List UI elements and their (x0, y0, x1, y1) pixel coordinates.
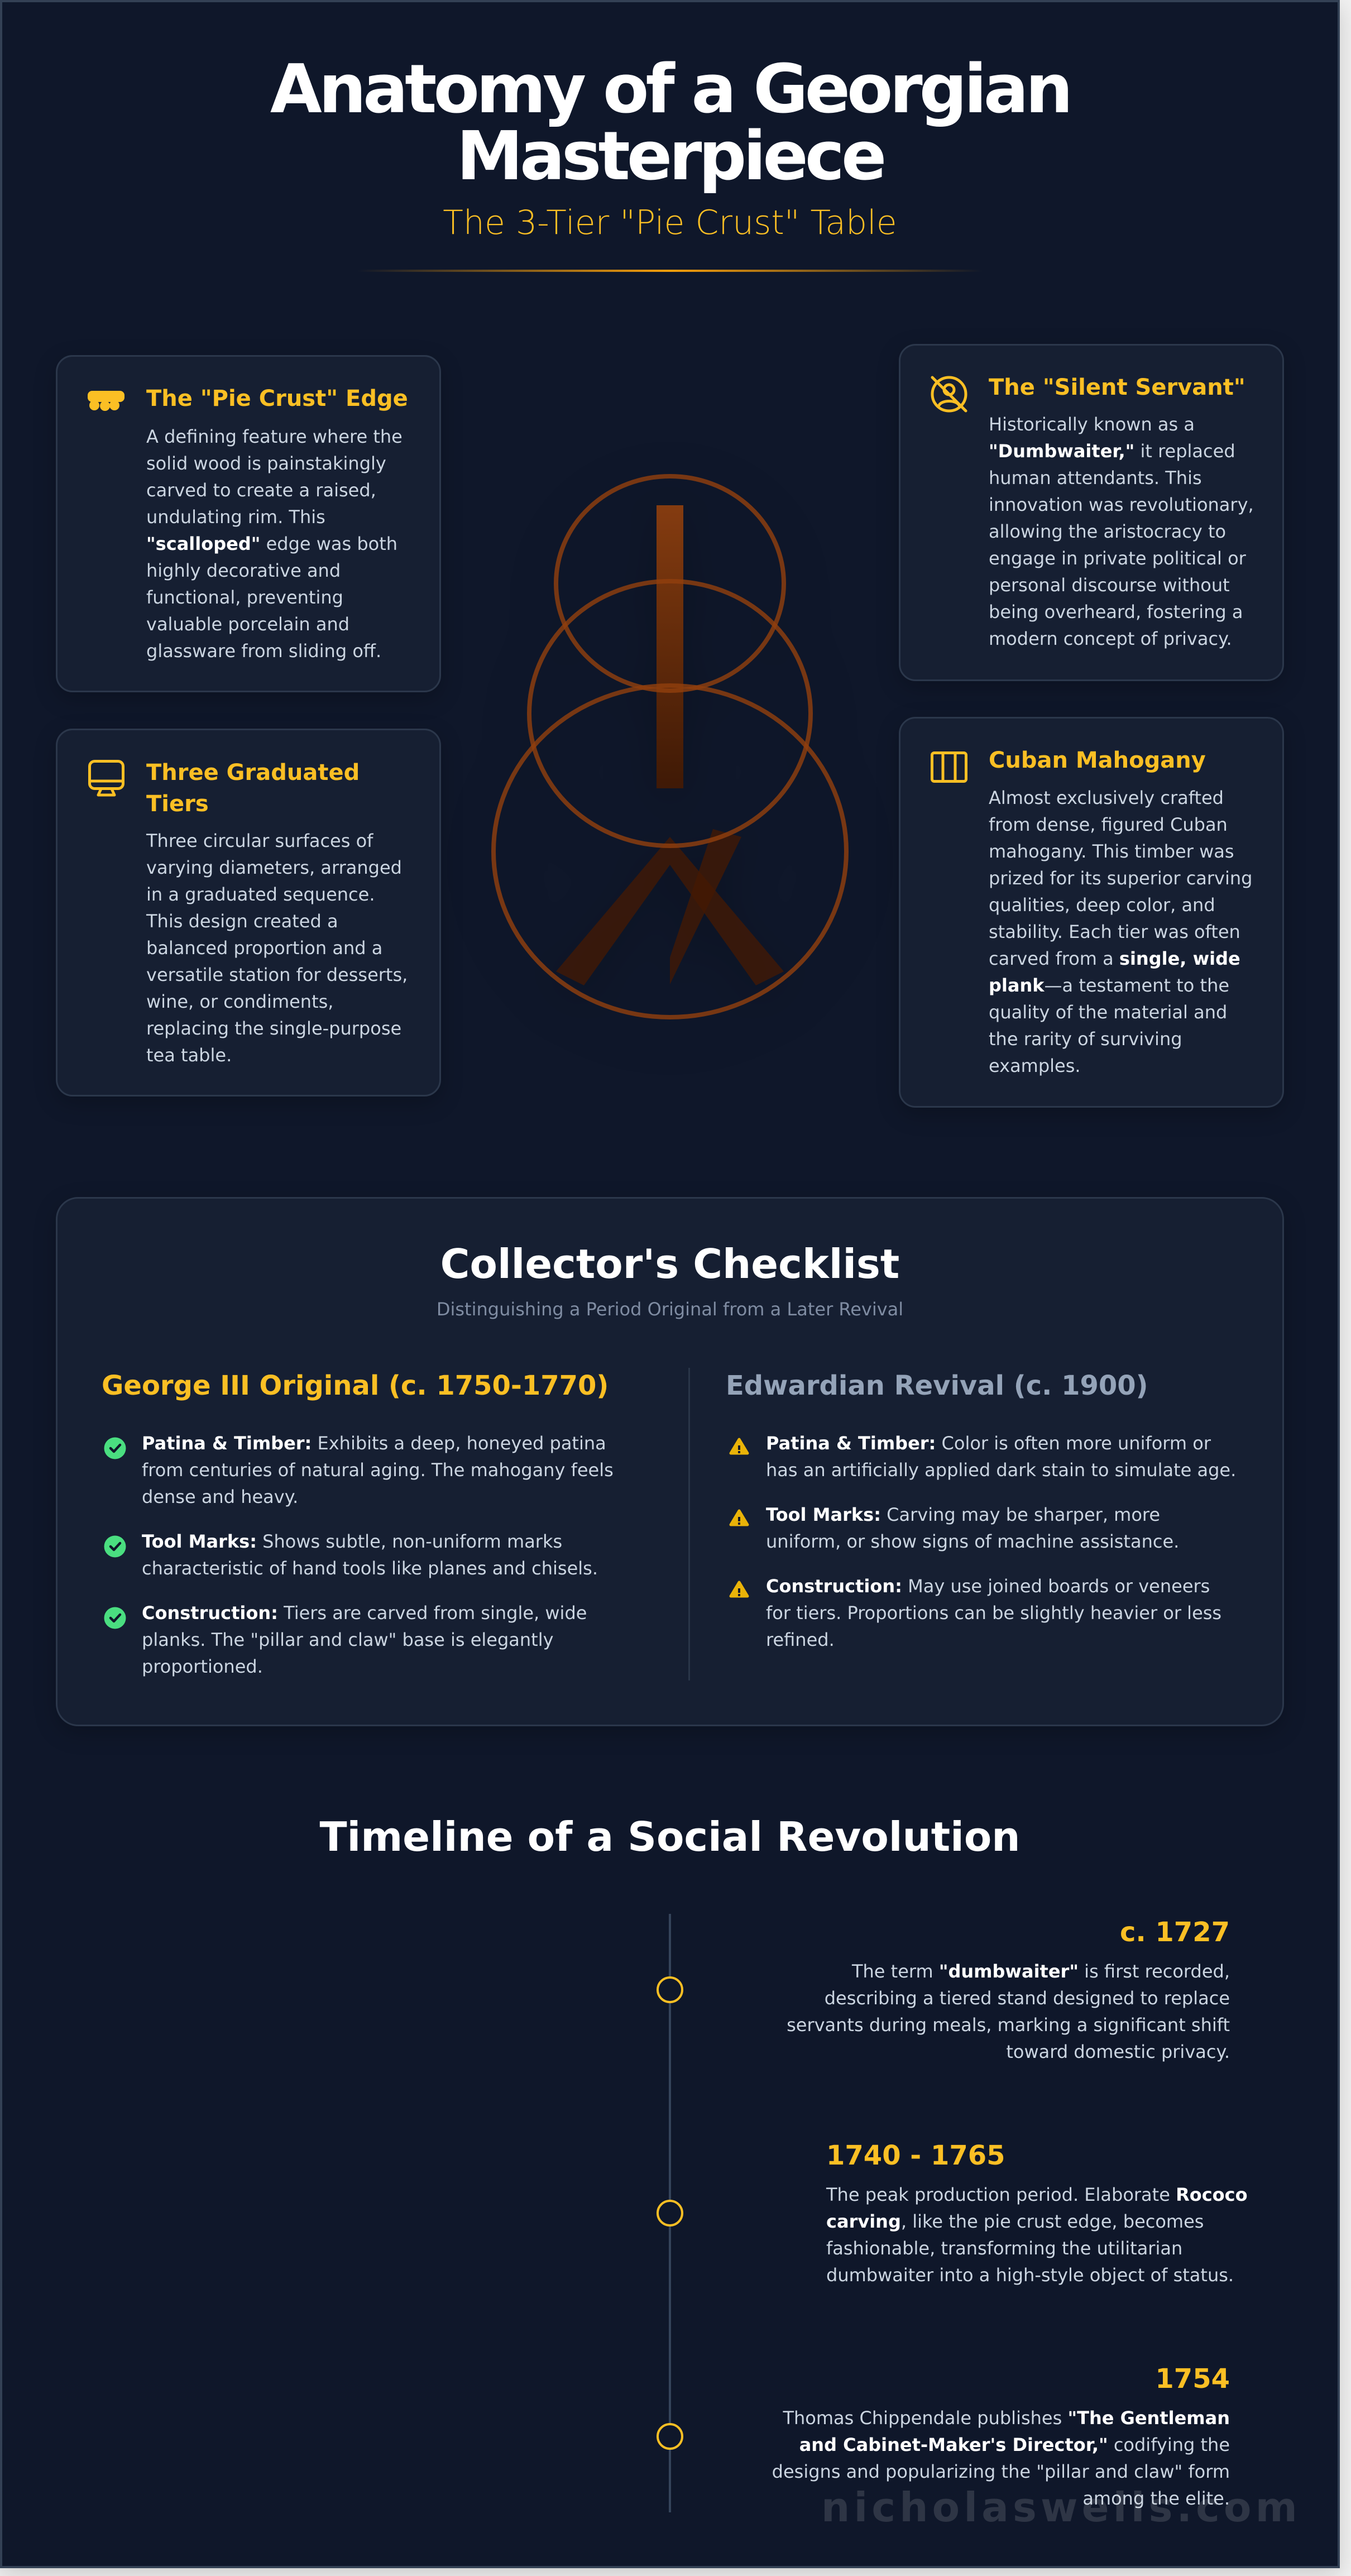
card heading: Tiers (146, 791, 209, 817)
checklist heading: Collector's Checklist (440, 1241, 899, 1287)
card heading: The "Silent Servant" (989, 375, 1245, 400)
timeline marker 3 (657, 2423, 683, 2450)
card text: stability. Each tier was often (989, 921, 1240, 942)
item: construction original (142, 1602, 587, 1677)
card text: being overheard, fostering a (989, 601, 1243, 623)
card text: examples. (989, 1055, 1081, 1076)
item: patina revival: has an artificially applied dark stain to simulate age. (766, 1459, 1236, 1481)
icon: warning 3 (729, 1581, 749, 1598)
column heading: revival: Edwardian Revival (c. 1900) (726, 1370, 1148, 1401)
card text: prized for its superior carving (989, 868, 1252, 889)
card text: qualities, deep color, and (989, 894, 1215, 916)
column heading: original: George III Original (c. 1750-1770) (102, 1370, 609, 1401)
item: patina revival (766, 1433, 1236, 1481)
card text: A defining feature where the (146, 426, 403, 447)
item: tool marks revival: uniform, or show signs of machine assistance. (766, 1531, 1179, 1552)
icon: warning 1 (729, 1438, 749, 1455)
central pillar (657, 505, 683, 788)
timeline entry: 1740 - 1765: 1740 - 1765 (826, 2140, 1005, 2171)
card text: the rarity of surviving (989, 1028, 1182, 1050)
entry text (826, 2184, 1248, 2286)
icon: check 2 (104, 1535, 126, 1558)
card text: functional, preventing (146, 587, 343, 608)
three tiers (494, 476, 846, 1017)
card text: quality of the material and (989, 1002, 1227, 1023)
title (270, 51, 1070, 195)
card text: allowing the aristocracy to (989, 521, 1226, 542)
item: patina original: from centuries of natural aging. The mahogany feels (142, 1459, 614, 1481)
item: construction revival: Construction: May use joined boards or veneers (766, 1576, 1210, 1597)
checklist subheading: Distinguishing a Period Original from a Later Revival (437, 1299, 903, 1320)
card text: wine, or condiments, (146, 991, 333, 1012)
card text: tea table. (146, 1045, 232, 1066)
card text: valuable porcelain and (146, 614, 349, 635)
card text: innovation was revolutionary, (989, 494, 1254, 515)
card text: balanced proportion and a (146, 937, 382, 959)
item: construction original: Construction: Tiers are carved from single, wide (142, 1602, 587, 1624)
panel: collector's checklist (56, 1197, 1284, 1726)
panel: silent servant (899, 344, 1284, 681)
item: tool marks revival (766, 1504, 1179, 1552)
card text: engage in private political or (989, 548, 1246, 569)
item: patina original: Patina & Timber: Exhibits a deep, honeyed patina (142, 1433, 606, 1454)
timeline entry: c. 1727 (787, 1917, 1230, 2062)
card text: modern concept of privacy. (989, 628, 1232, 649)
card text: highly decorative and (146, 560, 341, 581)
timeline axis (669, 1914, 671, 2512)
entry text: designs and popularizing the "pillar and claw" form (772, 2461, 1230, 2482)
card text: in a graduated sequence. (146, 884, 375, 905)
subtitle: The 3-Tier "Pie Crust" Table (443, 203, 897, 242)
card heading: Cuban Mahogany (989, 748, 1206, 773)
card heading: The "Pie Crust" Edge (146, 386, 408, 411)
card text: replacing the single-purpose (146, 1018, 401, 1039)
card text: mahogany. This timber was (989, 841, 1234, 862)
icon: columns (931, 751, 967, 783)
timeline marker 2 (657, 2200, 683, 2227)
icon: monitor (88, 760, 124, 796)
timeline heading: Timeline of a Social Revolution (319, 1813, 1021, 1860)
timeline entry: 1740 - 1765 (826, 2140, 1248, 2286)
card text (146, 830, 408, 1066)
card text (989, 787, 1252, 1076)
panel: three graduated tiers (56, 729, 441, 1097)
card text: Almost exclusively crafted (989, 787, 1224, 808)
title: Anatomy of a Georgian (270, 51, 1070, 128)
item: construction revival: for tiers. Proportions can be slightly heavier or less (766, 1602, 1221, 1624)
entry text: describing a tiered stand designed to replace (825, 1988, 1230, 2009)
card text: carved from a single, wide (989, 948, 1240, 969)
entry text: servants during meals, marking a significant shift (787, 2014, 1230, 2036)
item: tool marks original: characteristic of hand tools like planes and chisels. (142, 1558, 598, 1579)
entry text: carving, like the pie crust edge, becomes (826, 2211, 1204, 2232)
card text (989, 414, 1254, 649)
card heading (146, 760, 360, 817)
entry text (787, 1961, 1230, 2062)
table legs (556, 829, 784, 985)
icon: check 3 (104, 1607, 126, 1629)
timeline entry: 1754 (772, 2363, 1230, 2509)
entry text: among the elite. (1082, 2488, 1230, 2509)
item: construction revival (766, 1576, 1221, 1650)
watermark: nicholaswells.com (821, 2484, 1301, 2531)
card text: Historically known as a (989, 414, 1195, 435)
panel: pie crust edge (56, 355, 441, 692)
item: construction original: proportioned. (142, 1656, 263, 1677)
item: tool marks revival: Tool Marks: Carving may be sharper, more (766, 1504, 1160, 1525)
card text: plank—a testament to the (989, 975, 1229, 996)
item: patina original (142, 1433, 614, 1507)
entry text: The peak production period. Elaborate Rococo (826, 2184, 1248, 2205)
item: tool marks original: Tool Marks: Shows subtle, non-uniform marks (142, 1531, 562, 1552)
item: construction revival: refined. (766, 1629, 835, 1650)
entry text: Thomas Chippendale publishes "The Gentleman (783, 2407, 1230, 2429)
icon: check 1 (104, 1437, 126, 1459)
item: patina revival: Patina & Timber: Color is often more uniform or (766, 1433, 1211, 1454)
card text: undulating rim. This (146, 506, 325, 528)
icon: crossed-out person (931, 376, 967, 412)
card text: human attendants. This (989, 467, 1202, 489)
entry text: and Cabinet-Maker's Director," codifying the (799, 2434, 1230, 2455)
entry text (772, 2407, 1230, 2509)
card text: from dense, figured Cuban (989, 814, 1228, 835)
card text: glassware from sliding off. (146, 640, 381, 662)
timeline entry: c. 1727: c. 1727 (1120, 1917, 1230, 1948)
entry text: dumbwaiter into a high-style object of status. (826, 2264, 1234, 2286)
table illustration (491, 474, 849, 1019)
card text: This design created a (146, 911, 338, 932)
card text: Three circular surfaces of (146, 830, 373, 851)
card text: solid wood is painstakingly (146, 453, 386, 474)
entry text: fashionable, transforming the utilitarian (826, 2238, 1182, 2259)
card text: "scalloped" edge was both (146, 533, 397, 554)
icon: warning 2 (729, 1510, 749, 1526)
title: Masterpiece (457, 118, 883, 195)
timeline marker 1 (657, 1976, 683, 2003)
item: patina original: dense and heavy. (142, 1486, 298, 1507)
entry text: toward domestic privacy. (1006, 2041, 1230, 2062)
item: tool marks original (142, 1531, 598, 1579)
card text: varying diameters, arranged (146, 857, 402, 878)
card text (146, 426, 403, 662)
card text: "Dumbwaiter," it replaced (989, 440, 1235, 462)
card text: versatile station for desserts, (146, 964, 408, 985)
item: construction original: planks. The "pillar and claw" base is elegantly (142, 1629, 554, 1650)
card text: carved to create a raised, (146, 480, 376, 501)
card text: personal discourse without (989, 574, 1230, 596)
panel: cuban mahogany (899, 717, 1284, 1108)
timeline entry: 1754: 1754 (1155, 2363, 1230, 2395)
icon: pie crust (88, 391, 124, 411)
card heading: Three Graduated (146, 760, 360, 786)
entry text: The term "dumbwaiter" is first recorded, (852, 1961, 1230, 1982)
